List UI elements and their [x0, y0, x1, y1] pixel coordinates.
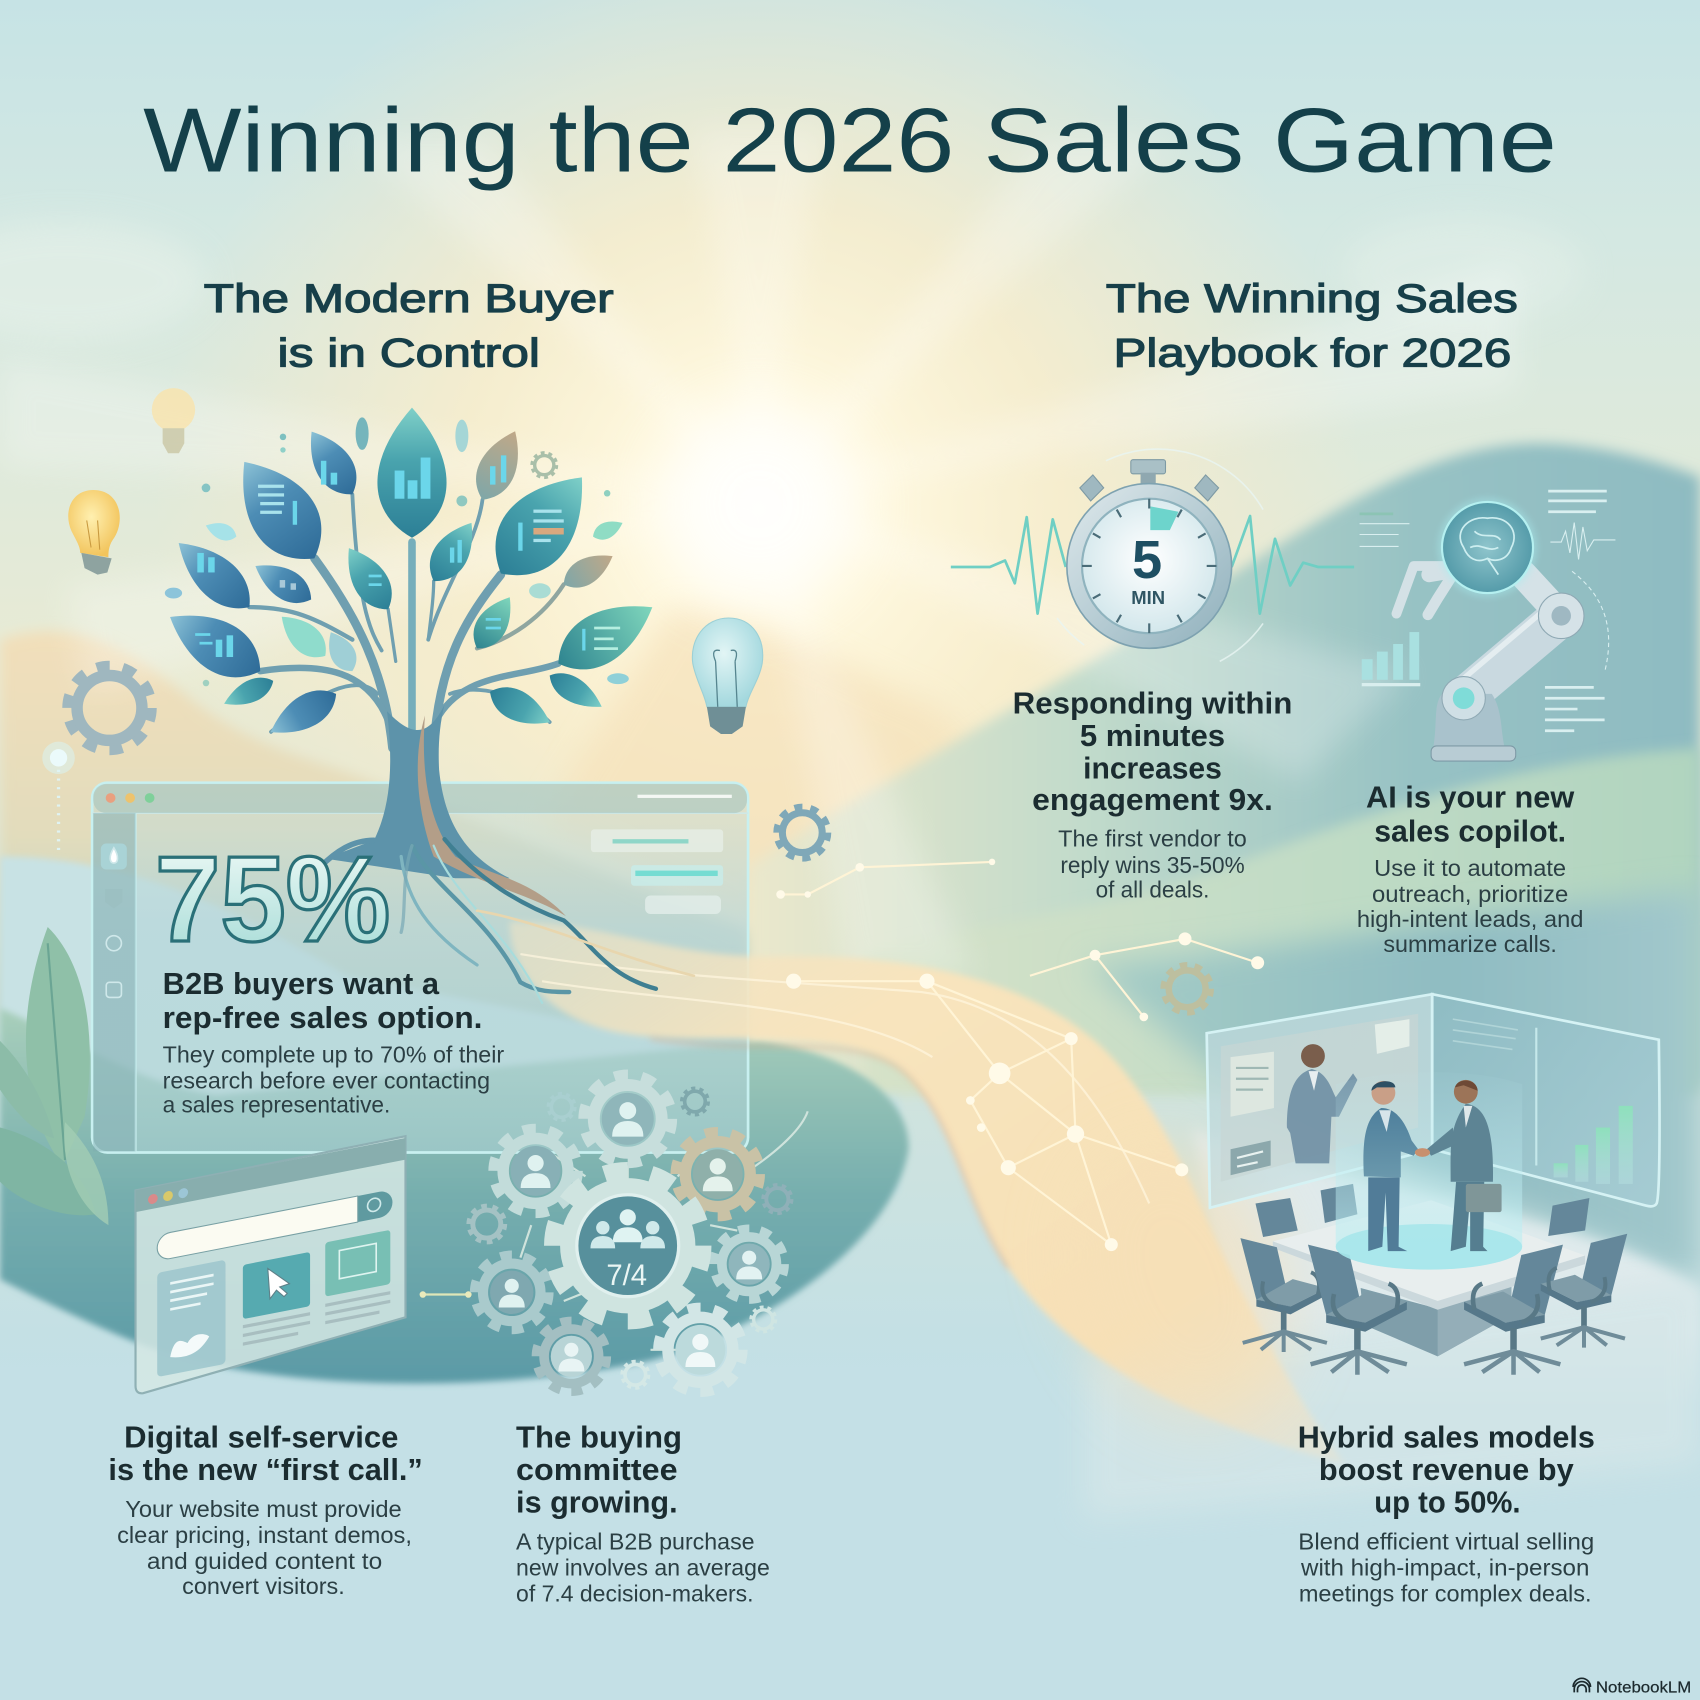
- icon: yellow bulb: [68, 490, 120, 575]
- text block: AI copilot: summarize calls.: [1383, 931, 1557, 957]
- network nodes on stream: [776, 859, 1264, 1251]
- left screen: [1207, 994, 1432, 1208]
- gear: person 6: [537, 1322, 606, 1391]
- text block: digital self-service: Your website must provide: [125, 1496, 402, 1522]
- text block: digital self-service: [108, 1421, 423, 1599]
- text block: buying committee: [516, 1421, 770, 1606]
- leaf charts: [195, 455, 620, 657]
- bars: [1554, 1106, 1633, 1184]
- text block: responding: [1013, 687, 1292, 903]
- heading: Playbook for 2026: Playbook for 2026: [1113, 331, 1511, 375]
- text block: responding: of all deals.: [1096, 877, 1209, 903]
- text block: AI copilot: outreach, prioritize: [1372, 881, 1568, 907]
- text block: buying committee: new involves an average: [516, 1554, 770, 1580]
- text block: buying committee: of 7.4 decision-makers.: [516, 1580, 754, 1606]
- icon: stopwatch: MIN: [1131, 587, 1165, 608]
- gear: main 7/4: 7/4: [606, 1260, 647, 1292]
- window panel: 75% stat: [92, 783, 748, 1152]
- icon: robot arm with brain: [1360, 491, 1615, 761]
- stat: 75%: 75%: [155, 831, 390, 967]
- icon: stopwatch: 5: [1132, 530, 1162, 590]
- text block: buying committee: is growing.: [516, 1486, 678, 1519]
- text block: rep-free buyers: [163, 968, 505, 1117]
- gear: person 3: [677, 1133, 759, 1215]
- sidebar icons: [101, 843, 127, 997]
- text block: hybrid sales: with high-impact, in-person: [1300, 1554, 1589, 1580]
- icon: gear on stream: [1164, 965, 1210, 1012]
- text block: AI copilot: [1357, 782, 1583, 957]
- gear: person 5: [475, 1256, 548, 1329]
- text block: rep-free buyers: a sales representative.: [163, 1091, 390, 1117]
- text block: responding: reply wins 35-50%: [1060, 852, 1245, 878]
- branches: [249, 494, 564, 748]
- text block: AI copilot: high-intent leads, and: [1357, 906, 1583, 932]
- text block: responding: engagement 9x.: [1032, 784, 1273, 817]
- text block: responding: The first vendor to: [1058, 826, 1247, 852]
- text block: hybrid sales: [1298, 1421, 1595, 1606]
- text block: hybrid sales: boost revenue by: [1319, 1454, 1574, 1487]
- text block: hybrid sales: Blend efficient virtual selling: [1298, 1528, 1594, 1554]
- heading: is in Control: is in Control: [278, 331, 540, 375]
- NotebookLM logo: NotebookLM: [1596, 1679, 1691, 1696]
- text block: rep-free buyers: research before ever contacting: [163, 1068, 490, 1094]
- leaves: [157, 408, 665, 746]
- presenter: [1287, 1044, 1357, 1163]
- text block: AI copilot: sales copilot.: [1374, 815, 1566, 848]
- text block: buying committee: committee: [516, 1454, 678, 1487]
- text block: digital self-service: is the new “first call.”: [108, 1454, 423, 1487]
- text block: rep-free buyers: B2B buyers want a: [163, 968, 440, 1001]
- chat bubbles: [591, 829, 723, 914]
- icon: stopwatch: [951, 449, 1354, 661]
- gear: person 4: [715, 1230, 784, 1299]
- heading: The Modern Buyer: The Modern Buyer: [204, 277, 614, 321]
- window controls: [106, 793, 732, 803]
- text block: buying committee: The buying: [516, 1421, 682, 1454]
- text block: rep-free buyers: They complete up to 70% of their: [163, 1041, 505, 1067]
- icon: pale bulb: [152, 388, 195, 453]
- back chairs: [1255, 1184, 1589, 1237]
- hologram cylinder: [1336, 1072, 1522, 1270]
- lower-left teal hill: [0, 1008, 909, 1383]
- gears around tree: [42, 453, 827, 858]
- text block: AI copilot: Use it to automate: [1374, 855, 1566, 881]
- text block: digital self-service: Digital self-service: [124, 1421, 398, 1454]
- text block: hybrid sales: Hybrid sales models: [1298, 1421, 1595, 1454]
- man left: [1363, 1081, 1418, 1251]
- icon: blue bulb: [692, 618, 763, 734]
- text block: responding: Responding within: [1013, 687, 1292, 720]
- golden data stream: [510, 922, 1344, 1464]
- trunk: [325, 705, 510, 878]
- text block: digital self-service: clear pricing, instant demos,: [117, 1522, 412, 1548]
- roots: [320, 839, 694, 1003]
- table: [1273, 1200, 1585, 1356]
- foliage: left leaves: [0, 927, 108, 1225]
- chairs: [1240, 1234, 1627, 1375]
- heading: The Winning Sales: The Winning Sales: [1106, 277, 1518, 321]
- icon: buying committee gears: [469, 1076, 808, 1391]
- gear: person 2: [495, 1130, 577, 1212]
- gear: person 7: [659, 1309, 741, 1391]
- data lines: [1360, 491, 1615, 731]
- text block: buying committee: A typical B2B purchase: [516, 1528, 755, 1554]
- gear: person 1: [585, 1076, 671, 1162]
- chart: [1362, 632, 1420, 686]
- text block: hybrid sales: meetings for complex deals.: [1299, 1580, 1592, 1606]
- title: Winning the 2026 Sales Game: [143, 90, 1557, 191]
- text block: hybrid sales: up to 50%.: [1374, 1486, 1521, 1519]
- text block: AI copilot: AI is your new: [1366, 782, 1575, 815]
- right screen: [1432, 994, 1660, 1206]
- icon: self-service browser: [136, 1136, 472, 1393]
- text block: digital self-service: and guided content to: [147, 1548, 382, 1574]
- man right: [1415, 1080, 1502, 1251]
- tree: [157, 408, 694, 1003]
- gear: main 7/4: [555, 1173, 700, 1318]
- illustration: hybrid meeting: [1207, 994, 1660, 1375]
- text block: responding: increases: [1083, 752, 1222, 785]
- text block: rep-free buyers: rep-free sales option.: [163, 1002, 482, 1035]
- text block: digital self-service: convert visitors.: [182, 1573, 345, 1599]
- text block: responding: 5 minutes: [1080, 720, 1225, 753]
